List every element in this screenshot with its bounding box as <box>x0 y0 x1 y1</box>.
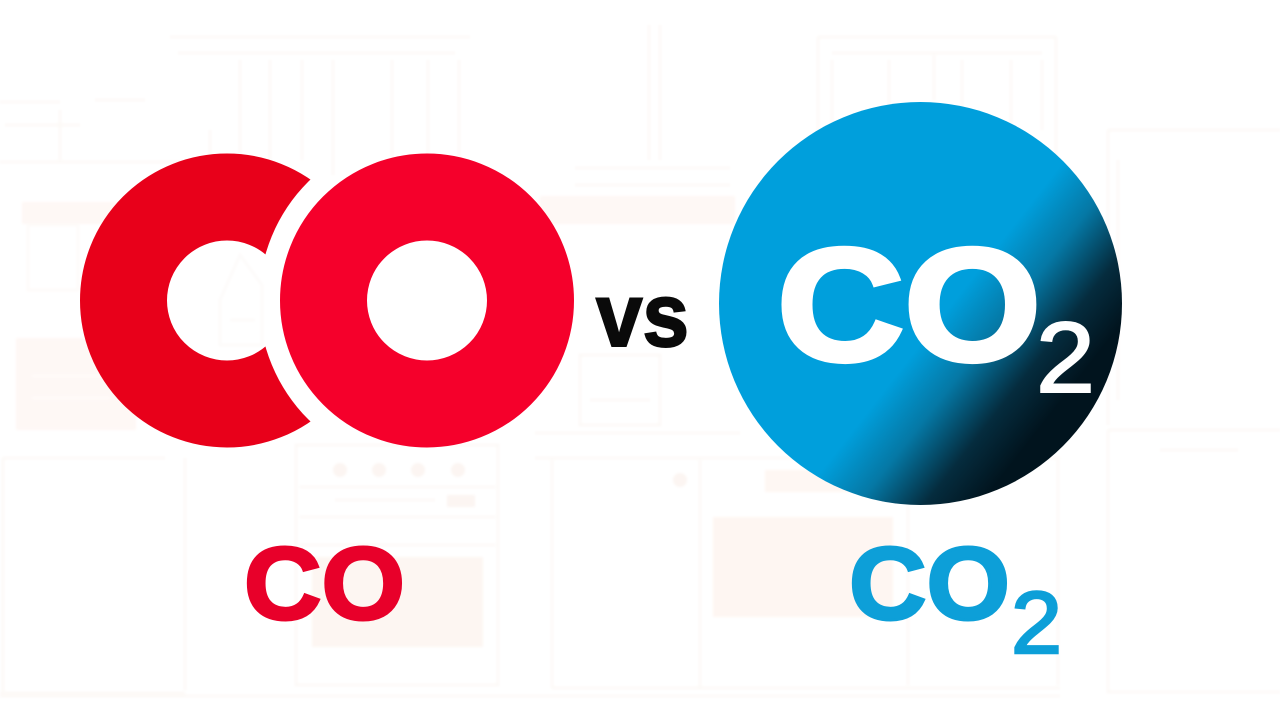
lower centre cabinets <box>535 458 1060 688</box>
oven <box>296 445 498 685</box>
red CO label: CO <box>244 526 405 641</box>
subscript 2: 2 <box>1011 573 1062 672</box>
vs label: vs <box>596 266 689 366</box>
CO white lettering: CO <box>777 215 1041 394</box>
upper cabinet left <box>170 37 470 175</box>
upper cabinet right <box>818 37 1056 160</box>
letter O ring <box>324 197 530 404</box>
range hood stem <box>575 25 730 185</box>
bottle <box>220 255 262 345</box>
blue gradient disc <box>719 102 1122 505</box>
icon: blue CO2 circle <box>719 102 1122 505</box>
right panel <box>1108 130 1280 430</box>
lower left cabinet <box>0 458 185 693</box>
left counter fills <box>22 202 162 224</box>
blue CO2 label <box>849 526 1062 672</box>
letter C ring <box>124 197 330 404</box>
subscript 2: 2 <box>1036 302 1095 414</box>
centre counter fill <box>540 196 735 224</box>
lower right cabinet <box>1108 430 1280 692</box>
icon: large red CO letters <box>124 197 530 404</box>
CO text: CO <box>849 526 1010 641</box>
left shelf <box>0 100 220 162</box>
